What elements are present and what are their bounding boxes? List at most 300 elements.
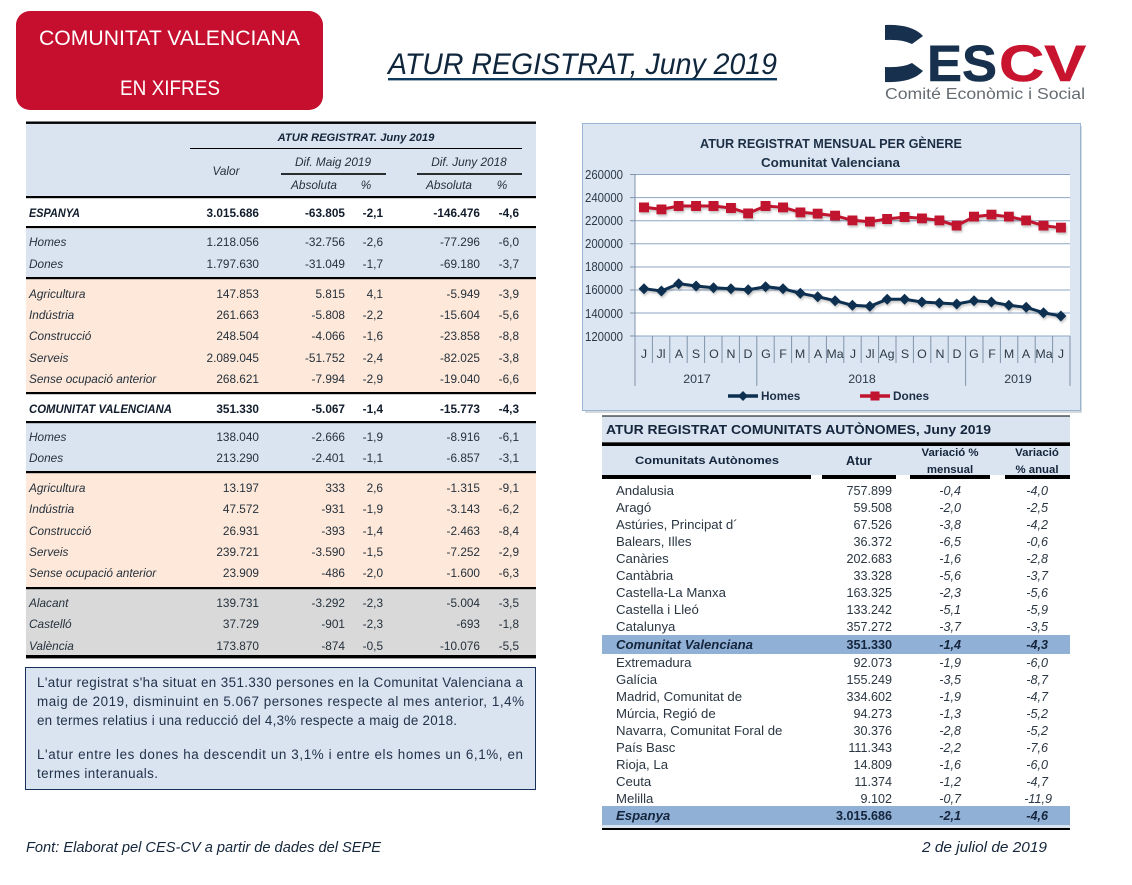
row: Navarra: 30.376 <box>853 724 892 738</box>
row: Espanya highlighted: 3.015.686 <box>836 809 892 823</box>
row: Madrid: Madrid, Comunitat de <box>616 689 742 704</box>
title: ATUR REGISTRAT, Juny 2019 <box>386 48 777 81</box>
row: Cantàbria: 33.328 <box>853 569 892 583</box>
row: Dones Espanya: Dones <box>29 257 63 271</box>
row: Ceuta: -4,7 <box>1026 775 1049 789</box>
row: Sense ocupació CV: -1.600 <box>447 566 480 580</box>
row: Espanya: 3.015.686 <box>207 206 259 220</box>
row: Aragó: 59.508 <box>853 501 892 515</box>
row: Canàries <box>616 551 1048 566</box>
x axis year labels: 2018 <box>848 372 876 386</box>
x axis month labels: Jl <box>657 347 665 361</box>
row: Indústria CV: -6,2 <box>499 502 519 516</box>
table header: ATUR REGISTRAT. Juny 2019 <box>277 132 435 144</box>
row: València: -874 <box>321 639 345 653</box>
row: Dones CV: -6.857 <box>447 451 480 465</box>
table header: Absoluta <box>425 178 472 192</box>
row: Castella i Lleó: -5,9 <box>1026 603 1048 617</box>
row: Dones CV: -2.401 <box>312 451 345 465</box>
x axis month labels: A <box>1022 347 1031 361</box>
row: Andalusia: -0,4 <box>939 484 961 498</box>
row: Construcció Espanya: -1,6 <box>363 329 383 343</box>
row: Dones Espanya: -31.049 <box>305 257 345 271</box>
row: Astúries: -3,8 <box>939 518 961 532</box>
table title: ATUR REGISTRAT COMUNITATS AUTÒNOMES, Juny 2019 <box>606 422 991 437</box>
table header: % <box>361 178 371 192</box>
y axis labels: 260000 <box>585 168 623 182</box>
row: Astúries: Astúries, Principat d´ <box>616 517 738 532</box>
row: Indústria Espanya: -15.604 <box>440 308 480 322</box>
callout: summary text: L'atur registrat s'ha situat en 351.330 persones en la Comunitat Valenciana a <box>37 675 524 690</box>
row: Madrid: -1,9 <box>939 690 961 704</box>
row: Alacant: -3.292 <box>312 596 345 610</box>
row: Sense ocupació CV: Sense ocupació anterior <box>29 566 157 580</box>
row: Canàries: 202.683 <box>846 552 892 566</box>
row: València: -0,5 <box>363 639 383 653</box>
table header: Absoluta <box>290 178 337 192</box>
row: Melilla <box>616 791 1052 806</box>
row: Andalusia: -4,0 <box>1026 484 1048 498</box>
row: Cantàbria: -5,6 <box>939 569 961 583</box>
row: Aragó <box>616 500 1049 515</box>
row: Navarra <box>616 723 1048 738</box>
row: Homes Espanya: -6,0 <box>499 235 519 249</box>
row: Espanya: -146.476 <box>433 206 480 220</box>
table header <box>26 122 536 196</box>
row: València: -5,5 <box>499 639 519 653</box>
row: Agricultura Espanya: -3,9 <box>499 287 519 301</box>
row: Catalunya: -3,5 <box>1026 620 1049 634</box>
x axis year labels: 2019 <box>1004 372 1032 386</box>
table column headers <box>602 442 1070 479</box>
row: Alacant <box>28 596 519 610</box>
row: Construcció Espanya: -23.858 <box>440 329 480 343</box>
row: Sense ocupació CV: -486 <box>321 566 345 580</box>
callout: summary text <box>26 668 536 790</box>
row: Castelló: -901 <box>321 617 345 631</box>
badge: Comunitat Valenciana en xifres: EN XIFRES <box>120 77 220 100</box>
row: Comunitat Valenciana: 351.330 <box>216 402 259 416</box>
row: Madrid <box>616 689 1049 704</box>
x axis month labels: F <box>779 347 787 361</box>
row: Castella-La Manxa: -2,3 <box>939 586 961 600</box>
logo: CES CV: CV <box>999 35 1086 92</box>
row: Extremadura <box>616 655 1048 670</box>
row: Alacant: 139.731 <box>216 596 259 610</box>
row: Castelló: 37.729 <box>223 617 259 631</box>
row: Homes CV: Homes <box>29 430 66 444</box>
row: Andalusia: 757.899 <box>846 484 892 498</box>
x axis month labels: D <box>744 347 753 361</box>
row: Balears: Balears, Illes <box>616 534 692 549</box>
row: Comunitat Valenciana <box>29 402 519 416</box>
callout: summary text: termes interanuals. <box>37 766 158 781</box>
logo: CES CV: Comité Econòmic i Social <box>885 86 1085 103</box>
row: Andalusia <box>616 483 1048 498</box>
row: Serveis Espanya: -2,4 <box>363 351 383 365</box>
row: Indústria Espanya: -5,6 <box>499 308 519 322</box>
row: Construcció Espanya <box>29 329 519 343</box>
row: Melilla: -11,9 <box>1024 792 1052 806</box>
x axis month labels: Ma <box>826 347 844 361</box>
row: Comunitat Valenciana highlighted: 351.330 <box>846 638 892 652</box>
y axis labels: 180000 <box>585 260 623 274</box>
row: Agricultura Espanya: 147.853 <box>216 287 259 301</box>
row: Agricultura CV: -1.315 <box>447 481 480 495</box>
row: Múrcia <box>616 706 1048 721</box>
table: atur registrat per territori <box>26 122 536 658</box>
row: Indústria Espanya: 261.663 <box>216 308 259 322</box>
row: Rioja: Rioja, La <box>616 757 669 772</box>
row: Comunitat Valenciana: COMUNITAT VALENCIANA <box>29 402 172 416</box>
legend: Dones: Dones <box>893 389 929 403</box>
row: Castella-La Manxa: 163.325 <box>846 586 892 600</box>
table column headers: mensual <box>927 464 973 476</box>
chart title: ATUR REGISTRAT MENSUAL PER GÈNERE <box>700 136 962 151</box>
row: Comunitat Valenciana: -15.773 <box>440 402 480 416</box>
table column headers: % anual <box>1015 464 1059 476</box>
legend: Homes: Homes <box>761 389 801 403</box>
legend: Homes <box>728 389 801 403</box>
row: Agricultura Espanya <box>28 287 519 301</box>
row: Madrid: 334.602 <box>846 690 892 704</box>
row: Melilla: -0,7 <box>939 792 962 806</box>
row: Castella-La Manxa <box>616 585 1048 600</box>
x axis month labels <box>641 347 1064 361</box>
row: Serveis CV <box>29 545 519 559</box>
row: Galícia <box>616 672 1049 687</box>
row: País Basc: -2,2 <box>939 741 961 755</box>
row: Indústria Espanya: -5.808 <box>312 308 345 322</box>
y axis labels: 220000 <box>585 214 623 228</box>
row: Catalunya: 357.272 <box>846 620 892 634</box>
row: Homes Espanya: Homes <box>29 235 66 249</box>
row: Agricultura CV: 13.197 <box>223 481 259 495</box>
row: Navarra: -5,2 <box>1026 724 1048 738</box>
row: Castella i Lleó: -5,1 <box>939 603 961 617</box>
x axis month labels: S <box>692 347 700 361</box>
x axis month labels: F <box>988 347 996 361</box>
row: Balears: -6,5 <box>939 535 962 549</box>
x axis month labels: S <box>901 347 909 361</box>
x axis month labels: Ma <box>1035 347 1053 361</box>
row: Serveis Espanya: -3,8 <box>499 351 519 365</box>
row: Castella-La Manxa: -5,6 <box>1026 586 1048 600</box>
x axis month labels: J <box>641 347 647 361</box>
row: Construcció Espanya: Construcció <box>29 329 92 343</box>
row: Castelló: -2,3 <box>363 617 383 631</box>
x axis month labels: J <box>850 347 856 361</box>
row: Homes Espanya: -32.756 <box>305 235 345 249</box>
y axis labels: 200000 <box>585 237 623 251</box>
row: Ceuta: Ceuta <box>616 774 652 789</box>
row: Homes CV: -2.666 <box>312 430 345 444</box>
x axis month labels: M <box>1004 347 1014 361</box>
row: Múrcia: -1,3 <box>939 707 961 721</box>
row: Dones CV: Dones <box>29 451 63 465</box>
row: Sense ocupació Espanya <box>29 372 519 386</box>
row: Construcció Espanya: -8,8 <box>499 329 519 343</box>
row: Dones Espanya <box>29 257 519 271</box>
row: València <box>29 639 519 653</box>
row: Dones CV <box>29 451 519 465</box>
row: Construcció CV: -1,4 <box>363 524 383 538</box>
x axis month labels: A <box>675 347 684 361</box>
x axis month labels: Jl <box>866 347 874 361</box>
y axis labels: 140000 <box>585 307 623 321</box>
row: Balears: -0,6 <box>1026 535 1048 549</box>
row: País Basc: 111.343 <box>848 741 892 755</box>
x axis year labels: 2017 <box>683 372 711 386</box>
row: Serveis CV: -3.590 <box>312 545 345 559</box>
row: Agricultura CV: Agricultura <box>28 481 86 495</box>
row: Catalunya: Catalunya <box>616 619 676 634</box>
x axis month labels: G <box>761 347 771 361</box>
logo: CES CV: ES <box>927 35 997 92</box>
row: Comunitat Valenciana: -5.067 <box>312 402 345 416</box>
row: Espanya <box>29 206 519 220</box>
row: Ceuta <box>616 774 1049 789</box>
row: Dones Espanya: -69.180 <box>440 257 480 271</box>
row: Homes Espanya: -77.296 <box>440 235 480 249</box>
row: Castella i Lleó: Castella i Lleó <box>616 602 699 617</box>
row: Serveis CV: -1,5 <box>363 545 383 559</box>
x axis month labels: D <box>953 347 962 361</box>
legend: Dones <box>860 389 929 403</box>
line: Dones <box>644 206 1061 228</box>
row: Castella i Lleó <box>616 602 1048 617</box>
row: Canàries: Canàries <box>616 551 669 566</box>
row: Agricultura CV: -9,1 <box>499 481 519 495</box>
row: Galícia: Galícia <box>616 672 658 687</box>
table header: Valor <box>212 164 241 178</box>
row: Homes CV: -1,9 <box>363 430 383 444</box>
row: Extremadura: -6,0 <box>1026 656 1048 670</box>
x axis month labels: O <box>709 347 719 361</box>
row: Comunitat Valenciana: -1,4 <box>363 402 383 416</box>
row: Múrcia: -5,2 <box>1026 707 1048 721</box>
table column headers: Comunitats Autònomes <box>635 455 779 467</box>
row: Agricultura CV <box>28 481 519 495</box>
row: Indústria CV: -3.143 <box>447 502 480 516</box>
table header: Dif. Maig 2019 <box>295 155 371 169</box>
row: Serveis CV: 239.721 <box>216 545 259 559</box>
row: Sense ocupació CV: -2,0 <box>363 566 383 580</box>
row: València: -10.076 <box>440 639 480 653</box>
row: Sense ocupació CV <box>29 566 519 580</box>
row: Castella i Lleó: 133.242 <box>846 603 892 617</box>
row: Astúries: -4,2 <box>1026 518 1048 532</box>
row: Serveis CV: -2,9 <box>499 545 519 559</box>
row: Dones Espanya: 1.797.630 <box>207 257 259 271</box>
x axis month labels: M <box>795 347 805 361</box>
row: Melilla: Melilla <box>616 791 654 806</box>
row: País Basc: -7,6 <box>1026 741 1048 755</box>
y axis labels: 160000 <box>585 283 623 297</box>
row: País Basc <box>616 740 1048 755</box>
callout: summary text: maig de 2019, disminuint en 5.067 persones respecte al mes anterior, 1,4% <box>37 694 524 709</box>
y axis labels: 240000 <box>585 191 623 205</box>
row: Indústria CV: 47.572 <box>223 502 259 516</box>
x axis month labels: N <box>727 347 735 361</box>
date: 2 de juliol de 2019 <box>921 840 1047 856</box>
row: Cantàbria <box>616 568 1049 583</box>
line: Homes <box>644 284 1061 316</box>
row: Andalusia: Andalusia <box>616 483 675 498</box>
row: Galícia: -8,7 <box>1026 673 1049 687</box>
row: Balears <box>616 534 1048 549</box>
row: Sense ocupació Espanya: -7.994 <box>312 372 345 386</box>
row: Comunitat Valenciana highlighted: -1,4 <box>939 638 961 652</box>
row: Dones CV: -3,1 <box>499 451 519 465</box>
x axis year labels <box>683 372 1032 386</box>
row: Catalunya <box>616 619 1049 634</box>
row: Madrid: -4,7 <box>1026 690 1049 704</box>
row: Extremadura: 92.073 <box>853 656 892 670</box>
row: Castelló: -1,8 <box>499 617 519 631</box>
row: Serveis Espanya: Serveis <box>29 351 68 365</box>
x axis month labels: J <box>1058 347 1064 361</box>
row bands <box>26 196 536 658</box>
row: Espanya: -63.805 <box>305 206 345 220</box>
row: Múrcia: Múrcia, Regió de <box>616 706 716 721</box>
row: Aragó: Aragó <box>616 500 651 515</box>
row: Homes CV: -8.916 <box>447 430 480 444</box>
table column headers: Variació % <box>922 447 978 459</box>
row: Comunitat Valenciana highlighted: Comunitat Valenciana <box>616 637 753 652</box>
x axis month labels: N <box>936 347 944 361</box>
table: comunitats autònomes <box>602 416 1070 830</box>
row: Sense ocupació Espanya: 268.621 <box>216 372 259 386</box>
row: Construcció Espanya: 248.504 <box>216 329 259 343</box>
row: Espanya highlighted: -4,6 <box>1026 809 1049 823</box>
row: Homes CV: -6,1 <box>499 430 519 444</box>
row: Homes CV <box>29 430 519 444</box>
panel: line chart <box>582 124 1082 413</box>
row: Navarra: -2,8 <box>939 724 961 738</box>
source note: Font: Elaborat pel CES-CV a partir de dades del SEPE <box>26 840 381 856</box>
plot area <box>635 174 1070 336</box>
row: Serveis CV: Serveis <box>29 545 68 559</box>
row: Castella-La Manxa: Castella-La Manxa <box>616 585 727 600</box>
row: Comunitat Valenciana highlighted: -4,3 <box>1026 638 1048 652</box>
row: Homes CV: 138.040 <box>216 430 259 444</box>
row: Agricultura Espanya: 5.815 <box>315 287 345 301</box>
row: Alacant: -3,5 <box>499 596 519 610</box>
row: Alacant: Alacant <box>28 596 69 610</box>
badge: Comunitat Valenciana en xifres: COMUNITAT VALENCIANA <box>39 27 300 50</box>
table column headers: Variació <box>1015 447 1059 459</box>
row: Rioja: 14.809 <box>853 758 892 772</box>
row: Canàries: -2,8 <box>1026 552 1048 566</box>
row: Construcció CV: -8,4 <box>499 524 519 538</box>
row: Espanya: -2,1 <box>363 206 383 220</box>
row: Comunitat Valenciana: -4,3 <box>499 402 519 416</box>
row: Galícia: -3,5 <box>939 673 962 687</box>
row: Extremadura: Extremadura <box>616 655 692 670</box>
row: Castelló <box>29 617 519 631</box>
row: Canàries: -1,6 <box>939 552 961 566</box>
table title <box>602 416 1070 442</box>
row: Espanya highlighted: Espanya <box>616 808 670 823</box>
table column headers: Atur <box>846 454 872 468</box>
row: Alacant: -5.004 <box>447 596 480 610</box>
row: Construcció CV: -393 <box>321 524 345 538</box>
row: Sense ocupació Espanya: -2,9 <box>363 372 383 386</box>
row: Dones CV: -1,1 <box>363 451 383 465</box>
row: Agricultura Espanya: 4,1 <box>367 287 383 301</box>
row: Indústria CV: -1,9 <box>363 502 383 516</box>
row: Serveis CV: -7.252 <box>447 545 480 559</box>
x axis month labels: G <box>969 347 979 361</box>
row: Dones CV: 213.290 <box>216 451 259 465</box>
x axis month labels: A <box>814 347 823 361</box>
row: Aragó: -2,5 <box>1026 501 1049 515</box>
row: Construcció CV: -2.463 <box>447 524 480 538</box>
row: Rioja: -1,6 <box>939 758 961 772</box>
x axis month labels: Ag <box>879 347 895 361</box>
row: Alacant: -2,3 <box>363 596 383 610</box>
row: Dones Espanya: -1,7 <box>363 257 383 271</box>
row: Castelló: Castelló <box>29 617 72 631</box>
row: Serveis Espanya <box>29 351 519 365</box>
row: Melilla: 9.102 <box>860 792 892 806</box>
row: Homes Espanya: -2,6 <box>363 235 383 249</box>
row: Espanya: -4,6 <box>499 206 519 220</box>
row: Navarra: Navarra, Comunitat Foral de <box>616 723 782 738</box>
row: Agricultura Espanya: Agricultura <box>28 287 86 301</box>
badge: Comunitat Valenciana en xifres <box>16 11 323 110</box>
row: València: 173.870 <box>216 639 259 653</box>
row: Extremadura: -1,9 <box>939 656 961 670</box>
row: Dones Espanya: -3,7 <box>499 257 519 271</box>
row: Ceuta: -1,2 <box>939 775 961 789</box>
row: Espanya highlighted: -2,1 <box>939 809 961 823</box>
row: Catalunya: -3,7 <box>939 620 962 634</box>
row: Homes Espanya <box>29 235 519 249</box>
row: Sense ocupació CV: 23.909 <box>223 566 259 580</box>
row: Construcció CV: 26.931 <box>223 524 259 538</box>
y axis labels <box>585 168 623 344</box>
row: Rioja: -6,0 <box>1026 758 1048 772</box>
table header: % <box>497 178 507 192</box>
table header: Dif. Juny 2018 <box>431 155 507 169</box>
row: Indústria CV: -931 <box>321 502 345 516</box>
row: Indústria CV: Indústria <box>29 502 75 516</box>
row: Astúries: 67.526 <box>853 518 892 532</box>
row: Sense ocupació Espanya: -6,6 <box>499 372 519 386</box>
row: Rioja <box>616 757 1048 772</box>
row: Agricultura CV: 2,6 <box>367 481 383 495</box>
y axis labels: 120000 <box>585 330 623 344</box>
row: Galícia: 155.249 <box>846 673 892 687</box>
row: Sense ocupació CV: -6,3 <box>499 566 519 580</box>
row: Construcció CV: Construcció <box>29 524 92 538</box>
row: Balears: 36.372 <box>853 535 892 549</box>
row: Agricultura CV: 333 <box>325 481 345 495</box>
row: Sense ocupació Espanya: -19.040 <box>440 372 480 386</box>
row: Múrcia: 94.273 <box>853 707 892 721</box>
callout: summary text: en termes relatius i una reducció del 4,3% respecte a maig de 2018. <box>37 713 457 728</box>
row: Indústria Espanya: -2,2 <box>363 308 383 322</box>
logo: CES CV <box>885 25 1086 103</box>
row: Indústria Espanya: Indústria <box>29 308 75 322</box>
row: Indústria CV <box>29 502 519 516</box>
row: Serveis Espanya: -51.752 <box>305 351 345 365</box>
row: Comunitat Valenciana highlighted <box>602 635 1070 654</box>
row: Agricultura Espanya: -5.949 <box>447 287 480 301</box>
row: Sense ocupació Espanya: Sense ocupació anterior <box>29 372 157 386</box>
